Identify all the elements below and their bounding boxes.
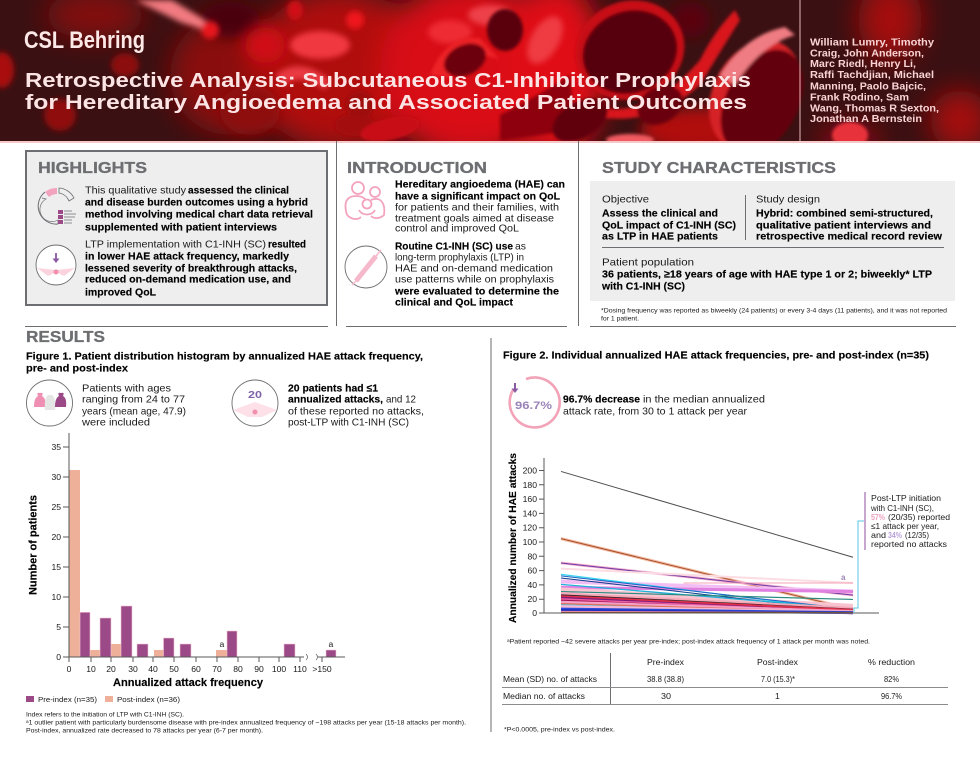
text: introduction two: were evaluated to determine the (394, 286, 559, 298)
icon: 20 patients: 20 (248, 390, 263, 401)
authors (810, 38, 939, 125)
text: median decrease: attack rate, from 30 to 1 attack per year (563, 406, 747, 418)
footnote: dosing (601, 308, 947, 322)
text: twenty patients: of these reported no attacks, (288, 406, 424, 418)
callout: and (871, 530, 886, 540)
icon: 96.7 percent (510, 377, 560, 427)
x axis labels: 100 (272, 664, 286, 674)
footnote: severe attacks: ᵃPatient reported ~42 severe attacks per year pre-index; post-index attack frequency of 1 attack per month was noted. (507, 638, 870, 646)
text: age: were included (81, 416, 150, 428)
icon: attack reduction (36, 245, 76, 285)
line chart y labels: 20 (527, 594, 537, 604)
study design: Hybrid: combined semi-structured, (756, 208, 933, 220)
patient population: Patient population (602, 256, 694, 268)
authors: Raffi Tachdjian, Michael (810, 70, 934, 81)
line chart y labels: 0 (532, 608, 537, 618)
text: median decrease: in the median annualized (643, 394, 765, 406)
callout: with C1-INH (SC), (870, 503, 934, 513)
figure 1 notes: ᵃ1 outlier patient with particularly burdensome disease with pre-index annualized frequency of ~198 attacks per year (15-18 attacks per month). (26, 720, 466, 726)
line chart axes (539, 458, 879, 613)
objective: QoL impact of C1-INH (SC) (602, 220, 736, 232)
x axis labels: 10 (86, 664, 96, 674)
figure 2 (502, 350, 950, 734)
text: introduction two: long-term prophylaxis (LTP) in (395, 252, 524, 264)
text: age (81, 382, 186, 428)
line chart y labels: 80 (527, 551, 537, 561)
histogram axes (63, 433, 345, 662)
text: highlight two: LTP implementation with C1-INH (SC) (85, 238, 266, 250)
table row: median: 96.7% (881, 691, 902, 701)
figure 1 notes: Index refers to the initiation of LTP with C1-INH (SC). (26, 712, 184, 718)
text: twenty patients: post-LTP with C1-INH (SC) (288, 416, 409, 428)
footnote: dosing: for 1 patient. (601, 316, 639, 322)
results table (502, 653, 948, 705)
table row: median: 1 (775, 691, 780, 701)
histogram legend: Post-index (n=36) (117, 695, 180, 704)
text: twenty patients: and 12 (386, 394, 416, 406)
callout: (12/35) (905, 530, 929, 540)
x axis labels: 40 (148, 664, 158, 674)
text: highlight one: This qualitative study (85, 184, 187, 196)
y axis labels: 5 (56, 622, 61, 632)
authors: Craig, John Anderson, (810, 48, 924, 60)
header divider (800, 0, 801, 141)
x axis labels: >150 (312, 664, 332, 674)
text: age: years (mean age, 47.9) (82, 406, 186, 418)
y axis labels: 0 (56, 652, 61, 662)
heading: introduction: INTRODUCTION (347, 160, 487, 177)
text: median decrease: 96.7% decrease (563, 394, 640, 406)
text: highlight one (85, 184, 313, 234)
histogram bars: pre-index (80, 606, 336, 657)
callout (854, 492, 950, 613)
icon: 96.7 percent: 96.7% (515, 400, 552, 412)
x axis labels (67, 664, 332, 674)
outlier markers: a (328, 639, 334, 649)
logo: CSL Behring (24, 27, 145, 54)
histogram bars: post-index (69, 470, 227, 657)
authors: Jonathan A Bernstein (810, 114, 922, 125)
figure 1 notes (26, 712, 466, 734)
text: introduction two: HAE and on-demand medication (395, 262, 553, 274)
text: twenty patients: annualized attacks, (288, 394, 383, 406)
y axis labels: 10 (51, 592, 61, 602)
objective (602, 194, 736, 242)
callout: reported no attacks (871, 539, 947, 549)
header bottom edge (0, 141, 980, 143)
histogram chart (28, 433, 345, 689)
objective: Objective (602, 194, 649, 206)
callout: Post-LTP initiation (871, 493, 941, 503)
footnote: dosing: *Dosing frequency was reported as biweekly (24 patients) or every 3-4 days (11 patients), and it was not reported (601, 308, 947, 314)
authors: Frank Rodino, Sam (810, 92, 909, 104)
icon: patients (26, 380, 72, 426)
text: introduction one: treatment goals aimed at disease (395, 212, 554, 224)
objective: as LTP in HAE patients (602, 230, 718, 242)
patient population: 36 patients, ≥18 years of age with HAE type 1 or 2; biweekly* LTP (602, 268, 932, 280)
x axis labels: 70 (212, 664, 222, 674)
text: twenty patients: 20 patients had ≤1 (288, 382, 378, 394)
x axis labels: 30 (128, 664, 138, 674)
x axis labels: 90 (254, 664, 264, 674)
study design: retrospective medical record review (756, 230, 943, 242)
y axis title: Number of patients (28, 495, 40, 595)
line chart (507, 453, 879, 623)
table row: median: 30 (661, 691, 671, 701)
header background: blood cells (0, 0, 980, 141)
text: highlight two: improved QoL (85, 286, 157, 298)
text: introduction two (394, 240, 559, 308)
table header: % reduction (868, 657, 915, 667)
table row: median: Median no. of attacks (503, 691, 585, 701)
text: twenty patients (288, 382, 424, 428)
text: introduction one: Hereditary angioedema (HAE) can (395, 178, 565, 190)
figure 1 title (26, 350, 423, 374)
line chart y labels: 140 (523, 508, 537, 518)
y axis labels: 35 (51, 442, 61, 452)
text: highlight one: method involving medical chart data retrieval (85, 208, 313, 220)
callout: 57% (871, 512, 885, 522)
text: highlight two: in lower HAE attack frequency, markedly (85, 250, 289, 262)
text: introduction one: control and improved QoL (395, 222, 519, 234)
study design (756, 194, 943, 242)
icon: 20 patients (232, 380, 278, 426)
y axis labels (51, 442, 61, 662)
panel: introduction (345, 160, 565, 308)
text: introduction one (395, 178, 565, 234)
figure 2 title: Figure 2. Individual annualized HAE attack frequencies, pre- and post-index (n=35) (503, 350, 929, 362)
text: introduction two: clinical and QoL impact (395, 296, 514, 308)
x axis labels: 20 (106, 664, 116, 674)
table header: Post-index (757, 657, 799, 667)
objective: Assess the clinical and (602, 208, 718, 220)
text: introduction one: have a significant impact on QoL (395, 190, 561, 202)
figure 1 (26, 350, 466, 734)
figure 1 title: Figure 1. Patient distribution histogram by annualized HAE attack frequency, (26, 350, 423, 362)
outlier markers: a (220, 639, 224, 649)
line chart y labels: 100 (523, 537, 537, 547)
line chart y title: Annualized number of HAE attacks (507, 453, 519, 623)
text: introduction two: use patterns while on prophylaxis (395, 274, 554, 286)
icon: family (345, 182, 384, 219)
title: for Hereditary Angioedema and Associated Patient Outcomes (25, 91, 747, 114)
table header (647, 657, 915, 667)
table row: mean: Mean (SD) no. of attacks (503, 674, 597, 684)
panel: highlights (26, 151, 327, 305)
authors: Wang, Thomas R Sexton, (810, 104, 939, 114)
text: median decrease (563, 394, 765, 418)
y axis labels: 30 (51, 472, 61, 482)
authors: Manning, Paolo Bajcic, (810, 82, 926, 92)
text: highlight two: resulted (268, 238, 306, 250)
text: highlight one: supplemented with patient interviews (85, 222, 277, 234)
histogram legend: Pre-index (n=35) (38, 695, 97, 704)
text: highlight two: reduced on-demand medication use, and (85, 274, 291, 286)
line chart y labels (523, 466, 537, 618)
title: Retrospective Analysis: Subcutaneous C1-Inhibitor Prophylaxis (25, 69, 751, 92)
outlier markers (220, 639, 334, 649)
text: introduction two: Routine C1-INH (SC) use (395, 240, 513, 252)
authors: Marc Riedl, Henry Li, (810, 59, 916, 70)
x axis labels: 60 (191, 664, 201, 674)
figure 1 title: pre- and post-index (26, 362, 128, 374)
text: highlight two (85, 238, 306, 298)
text: age: ranging from 24 to 77 (82, 394, 185, 406)
table row: median (503, 691, 902, 701)
y axis labels: 20 (51, 532, 61, 542)
study design: qualitative patient interviews and (756, 220, 931, 232)
line chart y labels: 60 (527, 566, 537, 576)
icon: chart review (38, 188, 76, 224)
study box (590, 181, 955, 301)
text: introduction one: for patients and their families, with (395, 202, 559, 214)
table row: mean: 82% (884, 674, 899, 684)
y axis labels: 15 (51, 562, 61, 572)
text: introduction two: as (515, 240, 526, 252)
x axis labels: 0 (67, 664, 72, 674)
figure 1 notes: Post-index, annualized rate decreased to 78 attacks per year (6-7 per month). (26, 728, 263, 734)
line chart y labels: 180 (523, 480, 537, 490)
header banner (0, 0, 980, 143)
table row: mean: 7.0 (15.3)* (761, 674, 796, 684)
callout: ≤1 attack per year, (871, 521, 939, 531)
text: highlight one: assessed the clinical (188, 184, 289, 196)
histogram legend (26, 695, 180, 704)
patient population (601, 256, 932, 292)
callout: 34% (888, 530, 902, 540)
callout: (20/35) reported (888, 512, 950, 522)
y axis labels: 25 (51, 502, 61, 512)
patient lines (561, 471, 853, 613)
table row: mean: 38.8 (38.8) (647, 674, 684, 684)
heading: results: RESULTS (26, 329, 105, 346)
x axis labels: 110 (293, 664, 307, 674)
icon: syringe (345, 246, 387, 288)
marker a: a (841, 573, 846, 582)
study design: Study design (756, 194, 820, 206)
footnote: p value: *P<0.0005, pre-index vs post-index. (504, 726, 615, 734)
text: highlight one: and disease burden outcomes using a hybrid (85, 196, 308, 208)
x axis labels: 80 (233, 664, 243, 674)
title (25, 69, 751, 114)
x axis title: Annualized attack frequency (113, 677, 264, 689)
authors: William Lumry, Timothy (810, 38, 934, 48)
text: age: Patients with ages (82, 382, 171, 394)
text: highlight two: lessened severity of breakthrough attacks, (85, 262, 297, 274)
line chart y labels: 120 (523, 523, 537, 533)
line chart y labels: 160 (523, 494, 537, 504)
heading: study characteristics: STUDY CHARACTERISTICS (602, 160, 836, 177)
patient population: with C1-INH (SC) (601, 280, 685, 292)
line chart y labels: 40 (527, 580, 537, 590)
heading: highlights: HIGHLIGHTS (38, 160, 147, 177)
column dividers (25, 141, 956, 732)
panel: study characteristics (590, 160, 955, 322)
x axis labels: 50 (169, 664, 179, 674)
table header: Pre-index (647, 657, 685, 667)
line chart y labels: 200 (523, 466, 537, 476)
table row: mean (503, 674, 899, 684)
